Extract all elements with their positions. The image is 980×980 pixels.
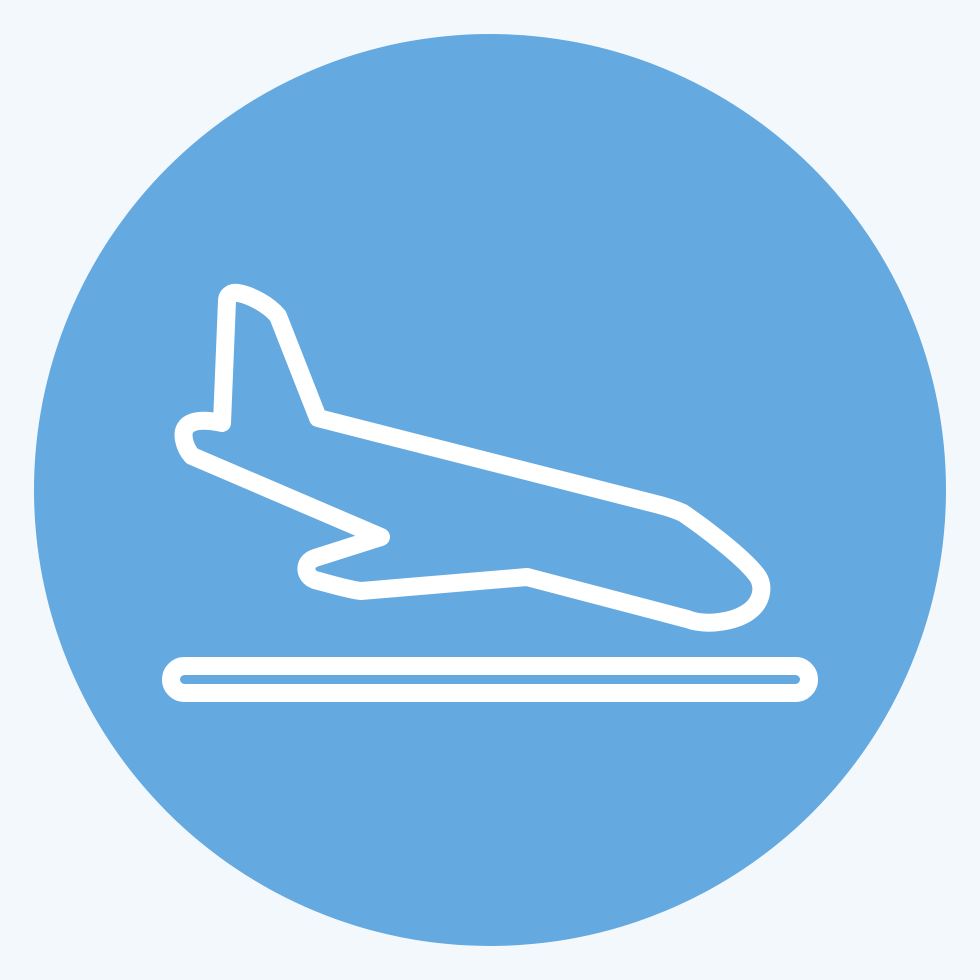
runway bar: [171, 666, 809, 693]
airplane outline: [184, 293, 761, 623]
